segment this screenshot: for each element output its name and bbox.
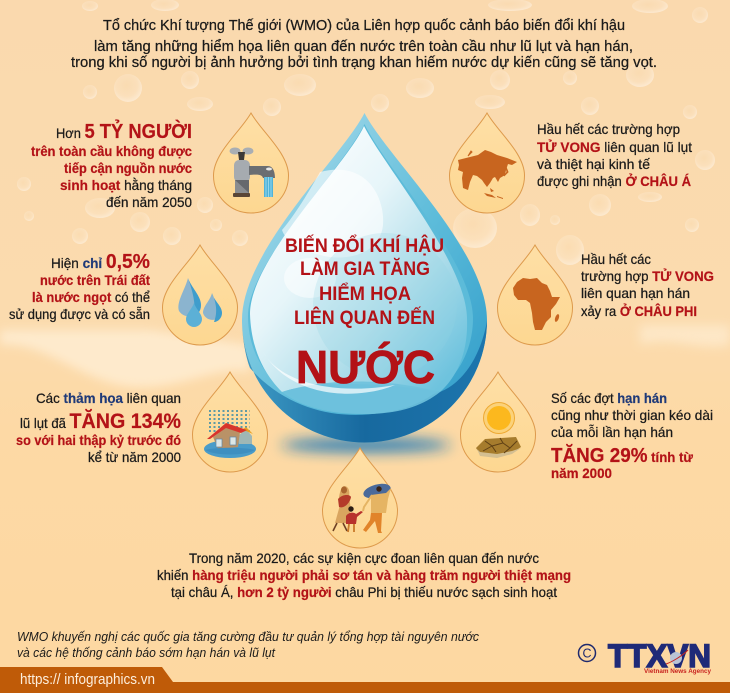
intro paragraph: [71, 17, 657, 71]
intro paragraph: trong khi số người bị ảnh hưởng bởi tình trạng khan hiếm nước dự kiến cũng sẽ tăng vọt.: [71, 54, 657, 71]
text: 0.5% fresh water: Hiện chỉ 0,5%: [51, 251, 150, 273]
recommendation note: WMO khuyến nghị các quốc gia tăng cường đầu tư quản lý tổng hợp tài nguyên nước: [17, 629, 479, 644]
text: floods up 134%: lũ lụt đã TĂNG 134%: [20, 410, 181, 433]
icon: sun and cracked earth in drop: [460, 372, 536, 472]
text: events of 2020: khiến hàng triệu người phải sơ tán và hàng trăm người thiệt mạng: [157, 567, 571, 583]
TTXVN logo: TTXVN: [608, 638, 711, 674]
text: Africa drought deaths: Hầu hết các: [581, 251, 651, 267]
text: droughts up 29%: năm 2000: [551, 465, 612, 481]
text: 0.5% fresh water: nước trên Trái đất: [40, 272, 150, 288]
icon: water drops in drop: [162, 245, 238, 345]
icon: flooded house in drop: [192, 372, 268, 472]
recommendation note: và các hệ thống cảnh báo sớm hạn hán và lũ lụt: [17, 645, 276, 660]
text: Asia flood deaths: Hầu hết các trường hợp: [537, 121, 680, 137]
text: 5 billion people: trên toàn cầu không được: [31, 143, 192, 159]
footer band with url: https:// infographics.vn: [20, 671, 155, 688]
text: events of 2020: Trong năm 2020, các sự kiện cực đoan liên quan đến nước: [189, 550, 539, 566]
text: events of 2020: [157, 550, 571, 600]
text: Asia flood deaths: TỬ VONG liên quan lũ lụt: [537, 138, 692, 155]
text: floods up 134%: Các thảm họa liên quan: [36, 390, 181, 406]
recommendation note: [17, 629, 479, 660]
text: Asia flood deaths: được ghi nhận Ở CHÂU Á: [537, 172, 691, 189]
text: Asia flood deaths: và thiệt hại kinh tế: [537, 156, 650, 172]
central water drop: [242, 113, 487, 452]
icon: migrating family in drop: [322, 448, 398, 548]
drop title: HIỂM HỌA: [319, 283, 411, 305]
text: Asia flood deaths: [537, 121, 692, 189]
intro paragraph: làm tăng những hiểm họa liên quan đến nước trên toàn cầu như lũ lụt và hạn hán,: [94, 38, 633, 55]
intro paragraph: Tổ chức Khí tượng Thế giới (WMO) của Liên hợp quốc cảnh báo biến đổi khí hậu: [103, 17, 625, 34]
text: 0.5% fresh water: là nước ngọt có thể: [32, 289, 150, 305]
text: 5 billion people: tiếp cận nguồn nước: [64, 160, 192, 176]
text: 5 billion people: Hơn 5 TỶ NGƯỜI: [56, 119, 192, 143]
TTXVN logo: C: [582, 646, 592, 660]
icon: Africa map in drop: [498, 245, 572, 345]
icon: tap in drop: [214, 113, 288, 213]
text: droughts up 29%: Số các đợt hạn hán: [551, 390, 667, 406]
drop title: BIẾN ĐỔI KHÍ HẬU: [285, 235, 444, 257]
footer band with url: [0, 667, 730, 693]
icon: Asia map in drop: [450, 113, 524, 213]
drop title: NƯỚC: [296, 341, 435, 393]
TTXVN logo: Vietnam News Agency: [644, 668, 711, 675]
text: droughts up 29%: của mỗi lần hạn hán: [551, 424, 673, 440]
text: floods up 134%: [16, 390, 181, 465]
text: events of 2020: tại châu Á, hơn 2 tỷ người châu Phi bị thiếu nước sạch sinh hoạt: [171, 584, 557, 600]
drop title: [285, 235, 444, 393]
text: 5 billion people: [31, 119, 192, 210]
text: 5 billion people: sinh hoạt hằng tháng: [60, 177, 192, 193]
text: droughts up 29%: cũng như thời gian kéo dài: [551, 407, 713, 423]
text: floods up 134%: so với hai thập kỷ trước đó: [16, 432, 181, 448]
text: 5 billion people: đến năm 2050: [106, 194, 192, 210]
text: droughts up 29%: TĂNG 29% tính từ: [551, 444, 694, 467]
text: Africa drought deaths: xảy ra Ở CHÂU PHI: [581, 302, 697, 319]
text: floods up 134%: kể từ năm 2000: [88, 449, 181, 465]
text: 0.5% fresh water: sử dụng được và có sẵn: [9, 306, 150, 322]
text: 0.5% fresh water: [9, 251, 150, 322]
drop title: LIÊN QUAN ĐẾN: [294, 307, 435, 329]
text: Africa drought deaths: trường hợp TỬ VONG: [581, 267, 714, 284]
drop title: LÀM GIA TĂNG: [300, 258, 430, 280]
text: Africa drought deaths: liên quan hạn hán: [581, 285, 690, 301]
text: droughts up 29%: [551, 390, 713, 481]
text: Africa drought deaths: [581, 251, 714, 319]
